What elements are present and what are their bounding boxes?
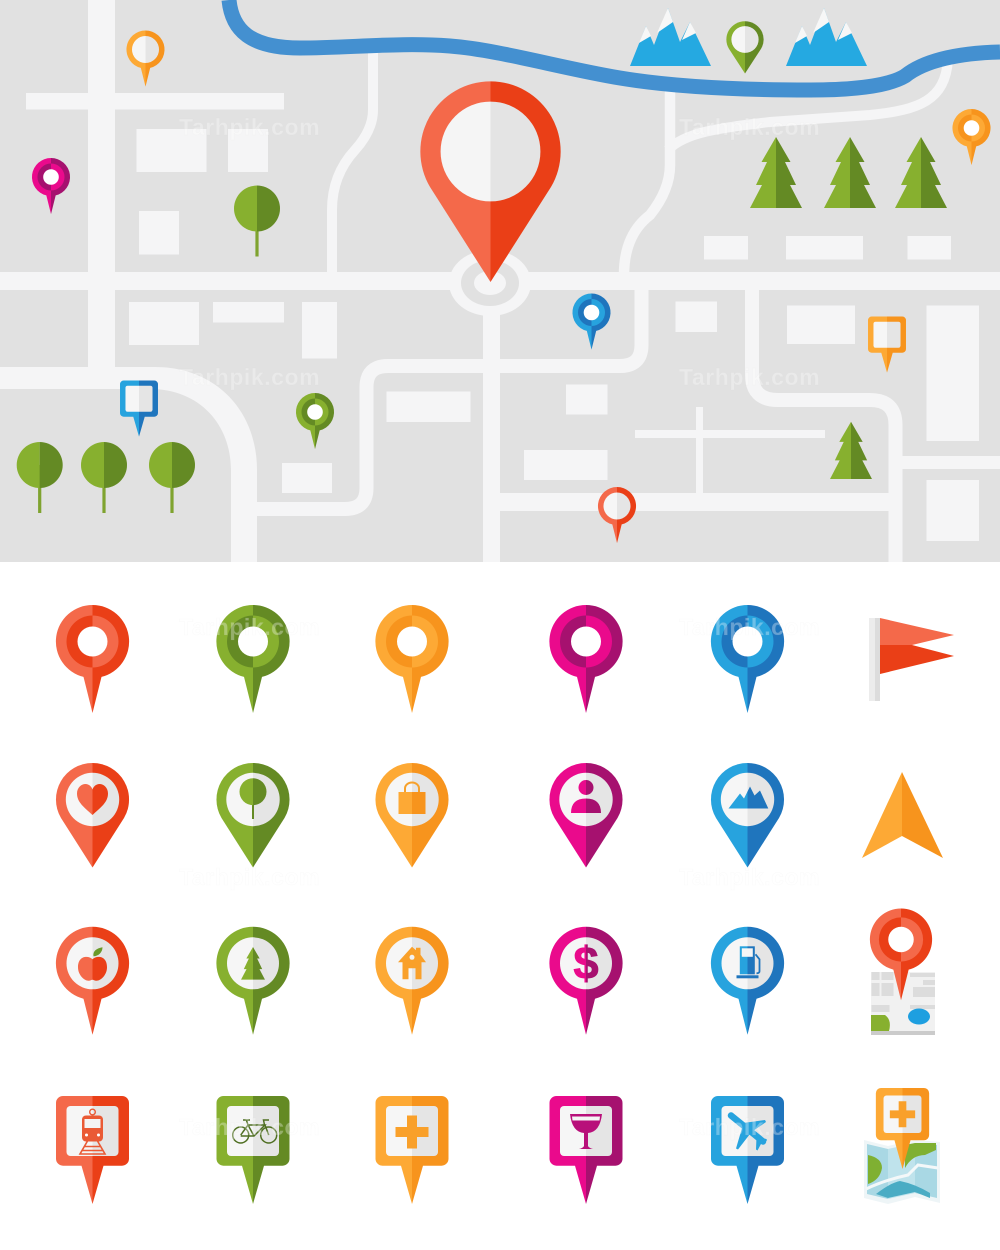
pin fuel pump (711, 927, 784, 1035)
road network (0, 0, 1000, 562)
pin bicycle (216, 1096, 290, 1204)
watermark: Tarhpik.com (679, 864, 820, 890)
pin train (56, 1096, 129, 1204)
icon: pin on folded map (864, 1088, 940, 1204)
map pin magenta donut (32, 158, 70, 214)
icon: pine tree 3 (895, 137, 947, 208)
icon: round tree lower 2 (81, 442, 127, 513)
watermark: Tarhpik.com (679, 114, 820, 140)
pin dollar: $ (573, 937, 599, 988)
river (229, 0, 1000, 90)
pin blue donut (711, 605, 784, 713)
pin tree (216, 763, 290, 868)
watermark: Tarhpik.com (179, 864, 320, 890)
map pin green donut (296, 393, 334, 449)
map pin orange ring (126, 31, 165, 87)
row 3: round pins (56, 927, 784, 1035)
pin dollar (549, 927, 623, 1035)
pin heart (56, 763, 129, 868)
watermark: Tarhpik.com (679, 614, 820, 640)
pin mountain (711, 763, 784, 868)
pin glass (550, 1096, 622, 1204)
pin shopping bag (375, 763, 449, 868)
watermark: Tarhpik.com (679, 1114, 820, 1140)
icon: pin on city map (870, 908, 935, 1035)
watermark: Tarhpik.com (179, 364, 320, 390)
icon: round tree lower 1 (17, 442, 63, 513)
pin green donut (216, 605, 290, 713)
icon: round tree top (234, 186, 280, 256)
pin person (549, 763, 623, 868)
pin airplane (711, 1096, 784, 1204)
pin dollar: $ (573, 937, 599, 988)
icon: pine tree 1 (750, 137, 802, 208)
icon: round tree lower 3 (149, 442, 195, 513)
pin apple (56, 927, 129, 1035)
map pin green drop (726, 21, 764, 73)
row 2: drop pins (56, 763, 784, 868)
map pin blue square (120, 380, 158, 437)
pin house (375, 927, 449, 1035)
icon: mountains right (786, 8, 867, 66)
icon: mountains left (630, 8, 711, 66)
main location pin (420, 81, 561, 282)
map pin red ring (598, 487, 636, 543)
pin pine (216, 927, 290, 1035)
icon: navigation arrow (862, 772, 943, 858)
watermark: Tarhpik.com (179, 114, 320, 140)
pin medical plus (376, 1096, 448, 1204)
icon: pine tree small (830, 422, 872, 479)
map pin orange square (868, 316, 906, 373)
watermark (179, 114, 820, 1140)
map pin orange donut (952, 109, 991, 165)
watermark: Tarhpik.com (179, 1114, 320, 1140)
icon: flag (869, 618, 954, 701)
row 4: square pins (56, 1096, 784, 1204)
watermark: Tarhpik.com (679, 364, 820, 390)
pin red donut (56, 605, 129, 713)
buildings (129, 129, 979, 541)
pin orange donut (375, 605, 449, 713)
watermark: Tarhpik.com (179, 614, 320, 640)
pin magenta donut (549, 605, 623, 713)
row 1: donut pins (56, 605, 784, 713)
map panel (0, 0, 1000, 562)
icon: pine tree 2 (824, 137, 876, 208)
map pin blue donut (572, 294, 611, 350)
